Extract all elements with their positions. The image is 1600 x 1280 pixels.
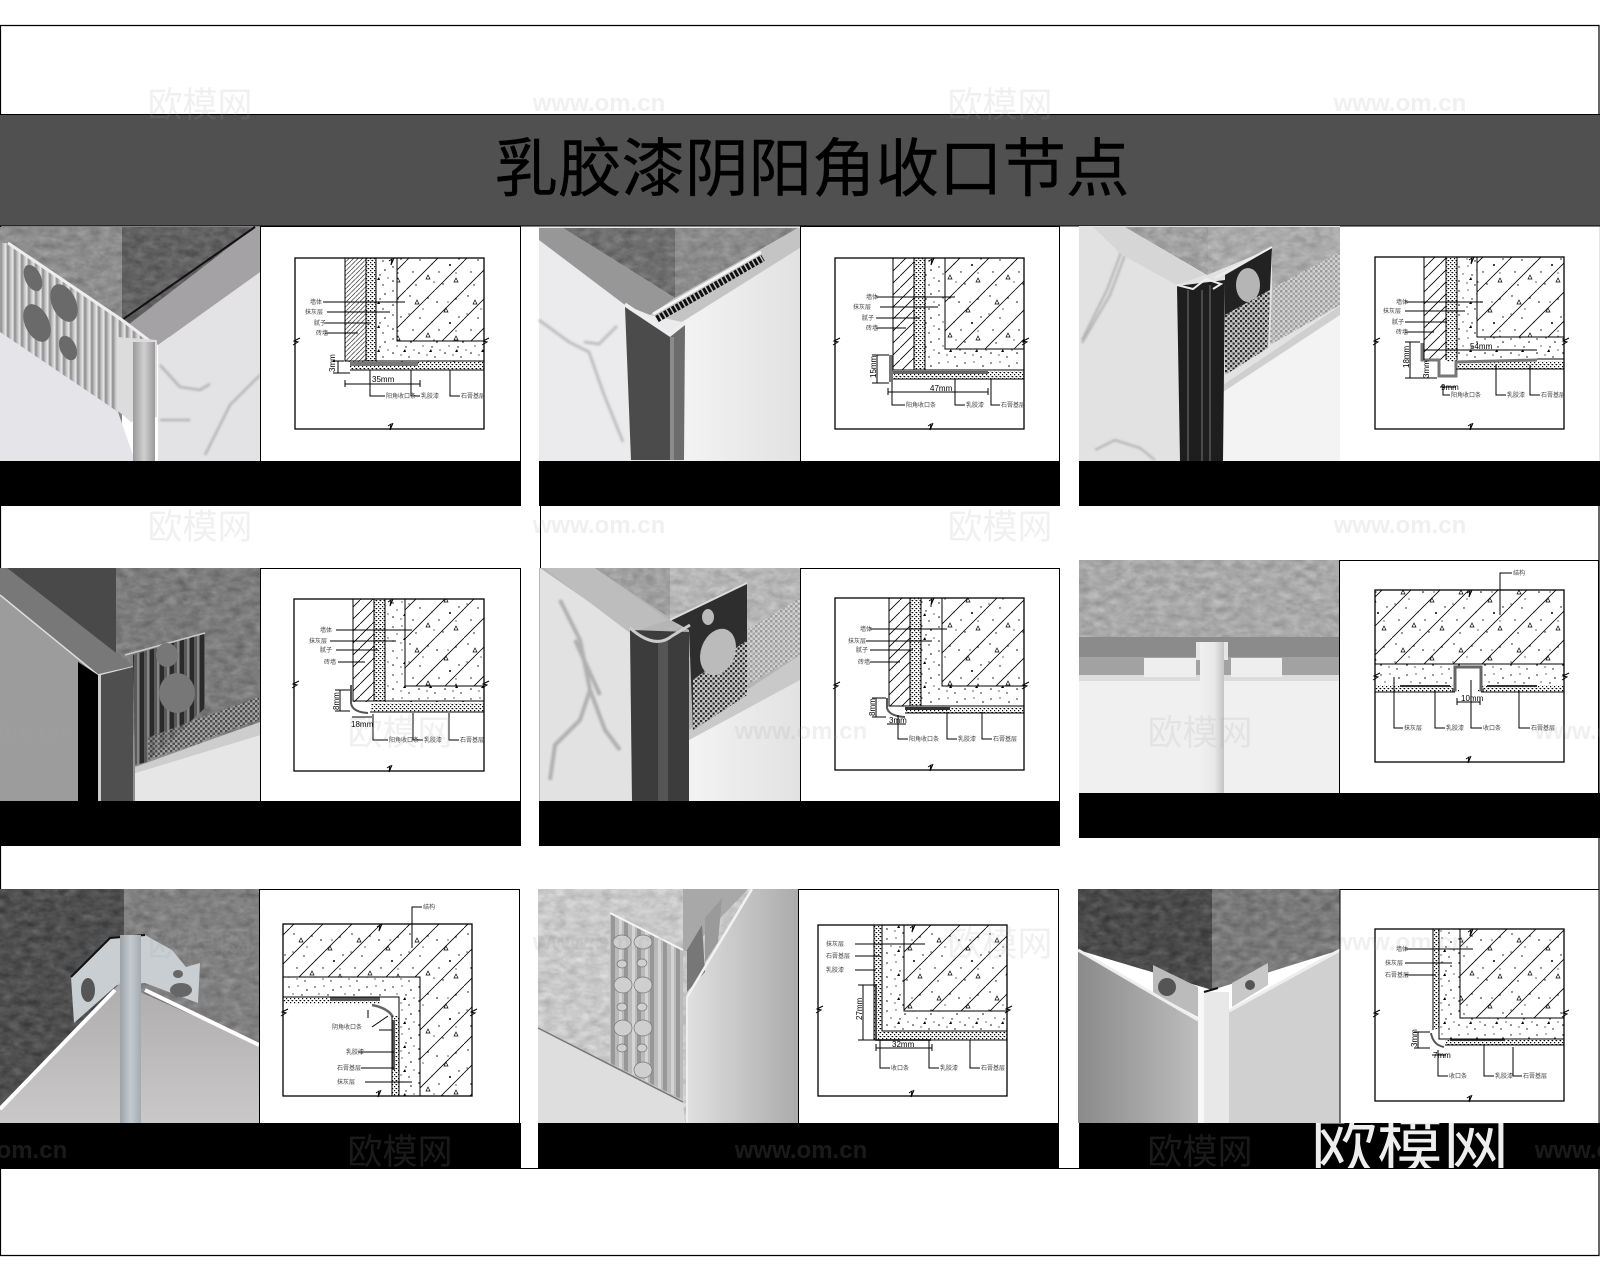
detail drawing 3: 18mm [1402, 345, 1411, 368]
detail drawing 2: 墙体 [866, 293, 878, 301]
detail drawing 3: 54mm [1470, 342, 1493, 351]
detail drawing 9: 收口条 [1449, 1072, 1467, 1080]
detail drawing 4: 抹灰层 [309, 637, 327, 645]
detail drawing 1: 抹灰层 [305, 308, 323, 316]
panel: node 5 [539, 568, 1060, 846]
drawing panel border [800, 226, 1060, 462]
detail drawing 5: 抹灰层 [848, 637, 866, 645]
caption bar [1079, 793, 1600, 838]
detail drawing 9: 石膏基层 [1385, 971, 1409, 979]
caption bar [538, 1123, 1059, 1168]
watermarks: 欧模网 [947, 508, 1053, 547]
detail drawing 2: 抹灰层 [853, 303, 871, 311]
large logo watermark: 欧模网 [1311, 1110, 1509, 1184]
detail drawing 5: 3mm [889, 716, 907, 725]
detail drawing 5: 砖墙 [858, 658, 870, 666]
caption bar [0, 801, 521, 846]
panel: node 3 [1079, 226, 1600, 506]
detail drawing 3: 石膏基层 [1541, 391, 1565, 399]
panel: node 4 [0, 568, 521, 846]
detail drawing 5: 石膏基层 [993, 735, 1017, 743]
panel: node 2 [539, 226, 1060, 506]
detail drawing 6: 结构 [1513, 569, 1525, 577]
detail drawing 2: 乳胶漆 [966, 401, 984, 409]
watermarks: www.om.cn [1333, 512, 1466, 539]
detail drawing 4: 石膏基层 [460, 736, 484, 744]
detail drawing 1: 阳角收口条 [386, 392, 416, 400]
watermarks: www.om.cn [734, 718, 867, 745]
detail drawing 4: 8mm [332, 692, 341, 710]
caption bar [1079, 461, 1600, 506]
detail drawing 8: 乳胶漆 [826, 966, 844, 974]
detail drawing 6: 乳胶漆 [1446, 724, 1464, 732]
detail drawing 5: 乳胶漆 [958, 735, 976, 743]
panel: node 1 [0, 226, 521, 506]
drawing panel border [260, 568, 520, 802]
detail drawing 9: 石膏基层 [1523, 1072, 1547, 1080]
photo: inner corner bead viewed from below [0, 889, 260, 1123]
detail drawing 5: 墙体 [860, 625, 872, 633]
detail drawing 8 [816, 925, 1012, 1097]
caption bar [1079, 1123, 1600, 1168]
detail drawing 9: 3mm [1410, 1029, 1419, 1047]
photo: dark profile with perforated flange [0, 568, 260, 801]
watermarks: www.om.cn [1333, 90, 1466, 117]
panel: node 7 [0, 889, 521, 1168]
detail drawing 1: 乳胶漆 [421, 392, 439, 400]
title: 乳胶漆阴阳角收口节点 [494, 135, 1130, 205]
caption bar [0, 1123, 521, 1168]
detail drawing 6: 抹灰层 [1404, 724, 1422, 732]
detail drawing 3: 抹灰层 [1383, 307, 1401, 315]
detail drawing 6: 收口条 [1483, 724, 1501, 732]
drawing panel border [798, 890, 1058, 1124]
watermarks: 欧模网 [347, 714, 453, 753]
watermarks: www.om.cn [532, 512, 665, 539]
detail drawing 7: 结构 [423, 903, 435, 911]
watermarks: www.om.cn [532, 929, 665, 956]
drawing panel [1340, 560, 1598, 794]
detail drawing 3: 腻子 [1392, 318, 1404, 326]
watermarks: www.om.cn [734, 1137, 867, 1164]
detail drawing 3: 墙体 [1396, 298, 1408, 306]
detail drawing 8: 抹灰层 [826, 940, 844, 948]
watermarks: 欧模网 [347, 1133, 453, 1172]
detail drawing 5: 8mm [868, 698, 877, 716]
detail drawing 2: 15mm [869, 355, 878, 378]
photo: white round corner bead [1078, 889, 1340, 1123]
watermarks: 欧模网 [147, 86, 253, 125]
drawing panel border [260, 890, 520, 1124]
detail drawing 1: 石膏基层 [461, 392, 485, 400]
detail drawing 1: 砖墙 [316, 329, 328, 337]
detail drawing 9: 7mm [1433, 1051, 1451, 1060]
detail drawing 3: 3mm [1422, 360, 1431, 378]
detail drawing 3: 9mm [1441, 383, 1459, 392]
watermarks: 欧模网 [947, 925, 1053, 964]
detail drawing 1: 墙体 [310, 298, 322, 306]
detail drawing 5: 腻子 [856, 646, 868, 654]
detail drawing 8: 石膏基层 [981, 1064, 1005, 1072]
caption bar [539, 801, 1060, 846]
detail drawing 6: 石膏基层 [1531, 724, 1555, 732]
detail drawing 4: 乳胶漆 [424, 736, 442, 744]
drawing panel [1340, 890, 1599, 1124]
detail drawing 4 [292, 599, 489, 772]
caption bar [0, 461, 521, 506]
detail drawing 5: 阳角收口条 [909, 735, 939, 743]
detail drawing 3 [1373, 257, 1569, 430]
detail drawing 9: 抹灰层 [1385, 959, 1403, 967]
detail drawing 6: 10mm [1461, 694, 1484, 703]
detail drawing 8: 32mm [892, 1040, 915, 1049]
detail drawing 9 [1373, 929, 1569, 1102]
detail drawing 1: 腻子 [314, 319, 326, 327]
panel: node 6 [1079, 560, 1600, 838]
caption bar [539, 461, 1060, 506]
watermarks: 欧模网 [1147, 1133, 1253, 1172]
detail drawing 3: 阳角收口条 [1451, 391, 1481, 399]
detail drawing 2: 47mm [930, 384, 953, 393]
detail drawing 4: 18mm [351, 720, 374, 729]
detail drawing 4: 腻子 [320, 646, 332, 654]
detail drawing 2: 腻子 [862, 314, 874, 322]
detail drawing 2: 石膏基层 [1001, 401, 1025, 409]
panel: node 9 [1078, 889, 1600, 1168]
detail drawing 7: 乳胶漆 [346, 1048, 364, 1056]
detail drawing 5 [833, 598, 1029, 771]
detail drawing 7: 抹灰层 [337, 1078, 355, 1086]
detail drawing 2: 砖墙 [866, 324, 878, 332]
detail drawing 7 [281, 903, 477, 1097]
detail drawing 8: 收口条 [891, 1064, 909, 1072]
drawing panel border [260, 226, 520, 462]
detail drawing 8: 石膏基层 [826, 952, 850, 960]
photo: white shadow-gap strip on ceiling [1079, 560, 1339, 793]
drawing panel border [800, 568, 1060, 802]
watermarks: 欧模网 [147, 508, 253, 547]
detail drawing 1: 35mm [372, 375, 395, 384]
watermarks: 欧模网 [147, 925, 253, 964]
detail drawing 4: 砖墙 [324, 658, 336, 666]
photo: pale grey perforated bead [538, 889, 798, 1123]
detail drawing 4: 阳角收口条 [389, 736, 419, 744]
detail drawing 8: 27mm [855, 997, 864, 1020]
detail drawing 8: 乳胶漆 [940, 1064, 958, 1072]
photo: black profile with mesh [1079, 226, 1340, 461]
photo: rounded black profile with mesh [539, 568, 800, 801]
detail drawing 7: 石膏基层 [337, 1064, 361, 1072]
watermarks: www.om.cn [532, 90, 665, 117]
photo: dark L-profile with perforated slit [539, 227, 800, 461]
detail drawing 1: 3mm [328, 354, 337, 372]
detail drawing 3: 乳胶漆 [1507, 391, 1525, 399]
detail drawing 9: 乳胶漆 [1495, 1072, 1513, 1080]
watermarks: 欧模网 [947, 86, 1053, 125]
title banner [0, 114, 1600, 226]
detail drawing 2: 阳角收口条 [906, 401, 936, 409]
panel: node 8 [538, 889, 1059, 1168]
detail drawing 6 [1373, 569, 1569, 763]
photo: perforated grey corner bead on marble [0, 227, 260, 461]
watermarks: 欧模网 [1147, 714, 1253, 753]
watermarks: www.om.cn [1333, 929, 1466, 956]
detail drawing 2 [833, 258, 1029, 430]
detail drawing 7: 阴角收口条 [332, 1023, 362, 1031]
detail drawing 4: 墙体 [320, 626, 332, 634]
detail drawing 1 [293, 258, 489, 430]
drawing panel [1340, 226, 1600, 462]
detail drawing 9: 墙体 [1396, 945, 1408, 953]
detail drawing 3: 砖墙 [1396, 328, 1408, 336]
